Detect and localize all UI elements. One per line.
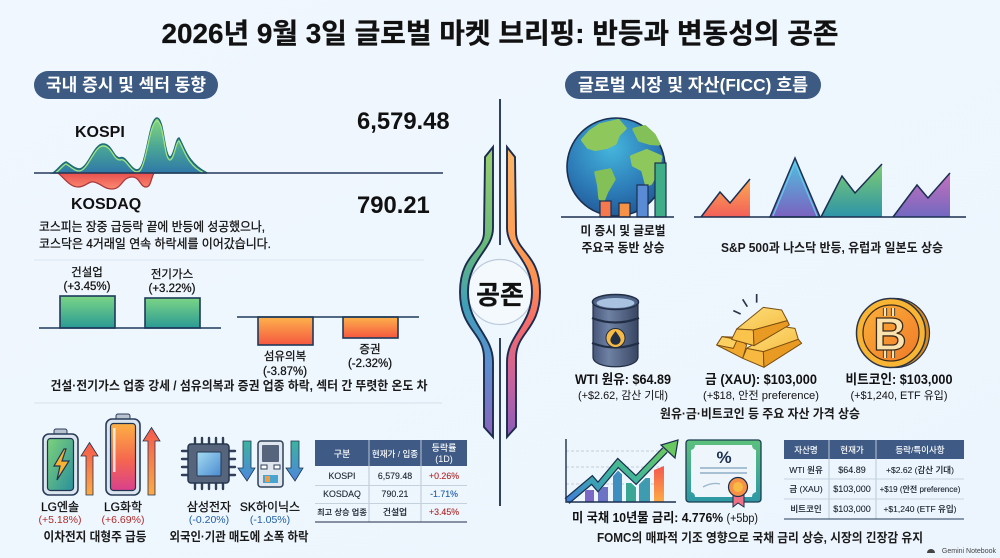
chart: treasury yield arrow — [566, 439, 678, 503]
label: SK hynix: (-1.05%) — [250, 514, 290, 526]
icon: bitcoin coin: B — [873, 308, 907, 360]
label: Samsung Electronics: (-0.20%) — [189, 514, 229, 526]
label: KOSPI: KOSPI — [75, 124, 125, 141]
table: global assets: +$2.62 (감산 기대) — [886, 465, 954, 475]
chart: falling sectors: (-3.87%) — [263, 366, 307, 378]
table: domestic summary: 최고 상승 업종 — [317, 507, 367, 517]
chart: rising sectors — [39, 266, 221, 328]
label: bitcoin — [846, 372, 952, 402]
value: KOSDAQ: 790.21 — [357, 192, 430, 219]
label: LG Chem: (+6.69%) — [102, 514, 144, 526]
caption: assets: 원유·금·비트코인 등 주요 자산 가격 상승 — [660, 406, 860, 421]
label: SK hynix — [240, 500, 300, 526]
caption: global stocks: 주요국 동반 상승 — [582, 241, 664, 255]
table: domestic summary: 현재가 / 입종 — [372, 449, 418, 459]
heading: global: 글로벌 시장 및 자산(FICC) 흐름 — [578, 75, 808, 95]
icon: bond certificate: % — [716, 448, 732, 467]
heading: domestic — [34, 71, 218, 99]
icon: bond certificate — [686, 440, 761, 507]
label: LG Energy Solution: (+5.18%) — [39, 514, 81, 526]
label: treasury yield: 미 국채 10년물 금리: 4.776% (+5bp) — [572, 510, 758, 525]
table: global assets: +$19 (안전 preference) — [880, 484, 961, 494]
caption: battery stocks: 이차전지 대형주 급등 — [44, 529, 146, 544]
table: global assets: WTI 원유 — [789, 465, 823, 475]
table: domestic summary: 구분 — [334, 449, 350, 459]
label: LG Chem — [102, 500, 144, 526]
center divider: coexistence — [460, 99, 540, 506]
icon: arrow down SK hynix — [286, 441, 303, 481]
icon: arrow down Samsung — [238, 441, 255, 481]
caption: global stocks — [580, 224, 666, 255]
table: domestic summary: -1.71% — [430, 489, 458, 499]
table: global assets — [784, 440, 964, 519]
chart: rising sectors: 건설업 — [71, 266, 103, 279]
chart: falling sectors: 섬유의복 — [264, 350, 306, 363]
text: market summary — [39, 219, 271, 251]
icon: gold bars — [717, 294, 802, 367]
icon: memory device — [258, 441, 283, 487]
label: KOSDAQ: KOSDAQ — [71, 196, 141, 213]
chart: KOSPI and KOSDAQ area — [34, 118, 443, 189]
label: gold: 금 (XAU): $103,000 — [705, 372, 817, 387]
text: market summary: 코스닥은 4거래일 연속 하락세를 이어갔습니다. — [39, 237, 271, 251]
center divider: coexistence: 공존 — [476, 280, 524, 310]
label: LG Chem: LG화학 — [104, 500, 142, 514]
table: global assets: $103,000 — [833, 484, 871, 494]
table: domestic summary: 790.21 — [382, 489, 409, 499]
value: KOSPI: 6,579.48 — [357, 108, 450, 135]
label: bitcoin: 비트코인: $103,000 — [846, 372, 952, 387]
heading: global — [565, 71, 821, 99]
table: domestic summary: 건설업 — [383, 506, 407, 517]
chart: falling sectors: 증권 — [359, 343, 381, 356]
chart: rising sectors: 전기가스 — [151, 268, 193, 281]
label: bitcoin: (+$1,240, ETF 유입) — [850, 389, 948, 402]
table: domestic summary: KOSDAQ — [323, 489, 361, 499]
caption: sector summary: 건설·전기가스 업종 강세 / 섬유의복과 증권 업종 하락, 섹터 간 뚜렷한 온도 차 — [50, 378, 428, 393]
table: global assets: $64.89 — [838, 465, 866, 475]
heading: domestic: 국내 증시 및 섹터 동향 — [46, 75, 206, 95]
panel: global market and assets — [561, 71, 966, 545]
caption: indices: S&P 500과 나스닥 반등, 유럽과 일본도 상승 — [721, 240, 943, 255]
table: domestic summary: KOSPI — [329, 471, 355, 481]
table: domestic summary: 6,579.48 — [378, 471, 412, 481]
panel: domestic market and sectors — [34, 71, 467, 544]
table: domestic summary: +0.26% — [429, 471, 459, 481]
icon: arrow up LG Chem — [143, 428, 160, 495]
watermark: Gemini Notebook — [942, 548, 996, 555]
table: domestic summary: 등락률 — [432, 442, 456, 453]
table: global assets: 등락/특이사항 — [895, 445, 945, 455]
chart: index mountains — [694, 158, 966, 217]
table: domestic summary: (1D) — [435, 454, 453, 464]
icon: LG Chem battery — [106, 414, 140, 495]
title: 2026년 9월 3일 글로벌 마켓 브리핑: 반등과 변동성의 공존 — [162, 18, 838, 49]
chart: falling sectors — [237, 317, 419, 378]
label: WTI: (+$2.62, 감산 기대) — [578, 389, 668, 402]
icon: globe with bars — [561, 118, 674, 217]
label: gold: (+$18, 안전 preference) — [703, 389, 819, 402]
chart: rising sectors: (+3.45%) — [64, 281, 111, 293]
label: WTI: WTI 원유: $64.89 — [575, 372, 671, 387]
chart: falling sectors: (-2.32%) — [348, 358, 392, 370]
icon: bitcoin coin — [856, 298, 930, 368]
label: Samsung Electronics — [187, 500, 231, 526]
table: domestic summary: +3.45% — [429, 507, 459, 517]
label: SK hynix: SK하이닉스 — [240, 500, 300, 514]
label: gold — [703, 372, 819, 402]
icon: semiconductor chip — [182, 438, 235, 489]
table: global assets: 자산명 — [794, 445, 818, 455]
caption: semiconductor stocks: 외국인·기관 매도에 소폭 하락 — [170, 529, 309, 544]
label: WTI — [575, 372, 671, 402]
label: LG Energy Solution — [39, 500, 81, 526]
table: domestic summary — [315, 440, 467, 522]
chart: rising sectors: (+3.22%) — [149, 283, 196, 295]
label: Samsung Electronics: 삼성전자 — [187, 500, 231, 514]
caption: FOMC: FOMC의 매파적 기조 영향으로 국채 금리 상승, 시장의 긴장감 유지 — [597, 530, 923, 545]
table: global assets: $103,000 — [833, 504, 871, 514]
icon: oil barrel — [592, 294, 639, 367]
table: global assets: +$1,240 (ETF 유입) — [883, 504, 957, 514]
table: global assets: 비트코인 — [790, 504, 822, 514]
caption: global stocks: 미 증시 및 글로벌 — [580, 224, 666, 238]
table: global assets: 현재가 — [840, 445, 864, 455]
icon: arrow up LG Energy Solution — [81, 442, 98, 495]
table: global assets: 금 (XAU) — [789, 484, 823, 494]
label: LG Energy Solution: LG엔솔 — [41, 500, 79, 514]
icon: LG Energy Solution battery — [43, 429, 78, 495]
text: market summary: 코스피는 장중 급등락 끝에 반등에 성공했으나, — [39, 219, 265, 234]
